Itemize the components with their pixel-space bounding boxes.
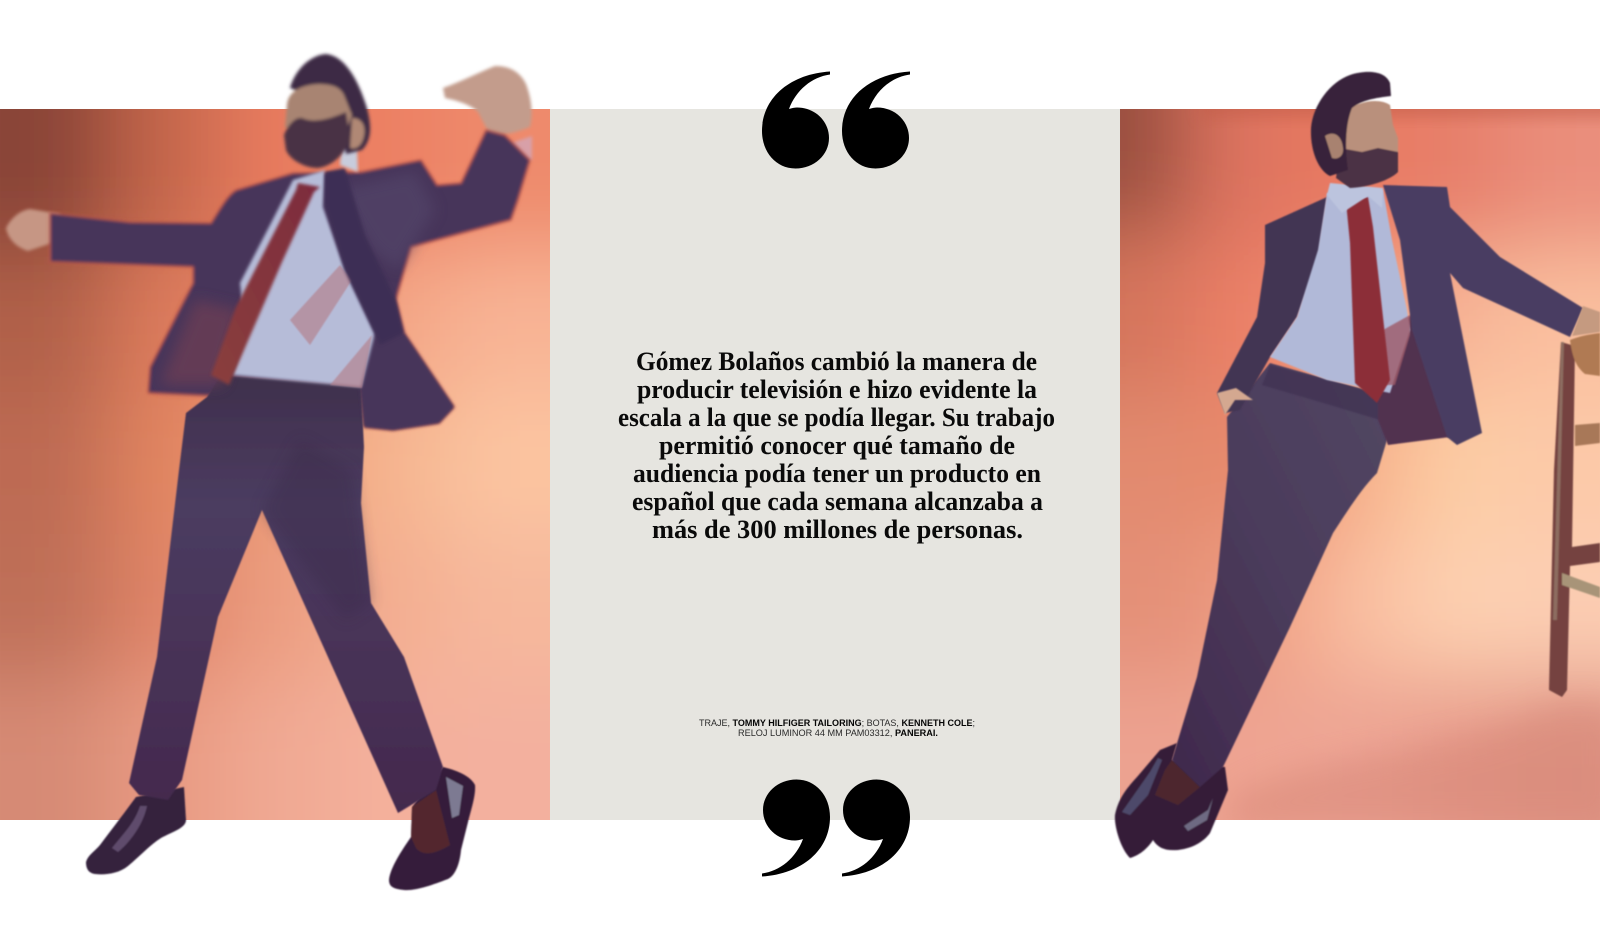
- figure: man leaning, right: [1115, 72, 1600, 858]
- right figure: hand on chair: [1572, 306, 1600, 336]
- text block: quote: escala a la que se podía llegar. Su trabajo: [618, 403, 1055, 432]
- left figure: outstretched hand: [6, 209, 61, 251]
- left figure: jacket lighter panel: [335, 172, 435, 270]
- text block: quote: audiencia podía tener un producto en: [633, 459, 1042, 488]
- right figure: jacket left side: [1217, 197, 1327, 413]
- left figure: lapel: [325, 168, 404, 345]
- panel: centre quote background: [550, 109, 1120, 820]
- right figure: hand in pocket: [1217, 388, 1253, 415]
- text block: quote: [618, 347, 1055, 544]
- right figure: jacket inner lining: [1378, 300, 1450, 445]
- right figure: head: [1311, 72, 1398, 188]
- left figure: raised hand: [443, 66, 532, 135]
- panel: right photo background: [1120, 109, 1600, 820]
- right figure: shoes: [1115, 743, 1228, 858]
- right figure: shirt: [1270, 190, 1410, 393]
- right figure: collar: [1327, 183, 1383, 213]
- text block: quote: más de 300 millones de personas.: [652, 515, 1023, 544]
- text block: quote: permitió conocer qué tamaño de: [659, 431, 1015, 460]
- text block: clothing credits: RELOJ LUMINOR 44 MM PAM03312, PANERAI.: [738, 727, 938, 738]
- left figure: collar: [340, 142, 358, 172]
- panel: left photo background: [0, 109, 550, 820]
- left figure: shirt reflections: [290, 265, 372, 388]
- left figure: shirt: [232, 170, 375, 387]
- left figure: lower jacket warm tone: [160, 300, 240, 385]
- left figure: trousers: [129, 375, 443, 813]
- left figure: jacket right skirt over trousers: [356, 333, 454, 430]
- right figure: jacket far sleeve and front: [1383, 185, 1583, 445]
- right figure: trousers: [1172, 363, 1390, 787]
- left figure: jacket: [50, 130, 530, 430]
- left figure: shoes: [86, 767, 475, 890]
- right figure: waistband: [1262, 365, 1385, 420]
- photo: chair at right: [1549, 333, 1600, 697]
- left figure: cuff: [503, 136, 532, 162]
- text block: quote: producir televisión e hizo evidente la: [637, 375, 1037, 404]
- left figure: head: [284, 54, 370, 168]
- text block: clothing credits: [699, 717, 975, 738]
- text block: quote: español que cada semana alcanzaba a: [632, 487, 1043, 516]
- left figure: trouser shading: [262, 440, 371, 620]
- figure: man dancing, left: [6, 54, 532, 890]
- text block: quote: Gómez Bolaños cambió la manera de: [636, 347, 1037, 376]
- text block: clothing credits: TRAJE, TOMMY HILFIGER TAILORING; BOTAS, KENNETH COLE;: [699, 717, 975, 728]
- right figure: shirt fold: [1383, 315, 1410, 385]
- right figure: tie: [1346, 197, 1390, 403]
- icon: opening quotation marks: [762, 72, 910, 168]
- left figure: tie: [211, 183, 320, 385]
- icon: closing quotation marks: [762, 780, 910, 876]
